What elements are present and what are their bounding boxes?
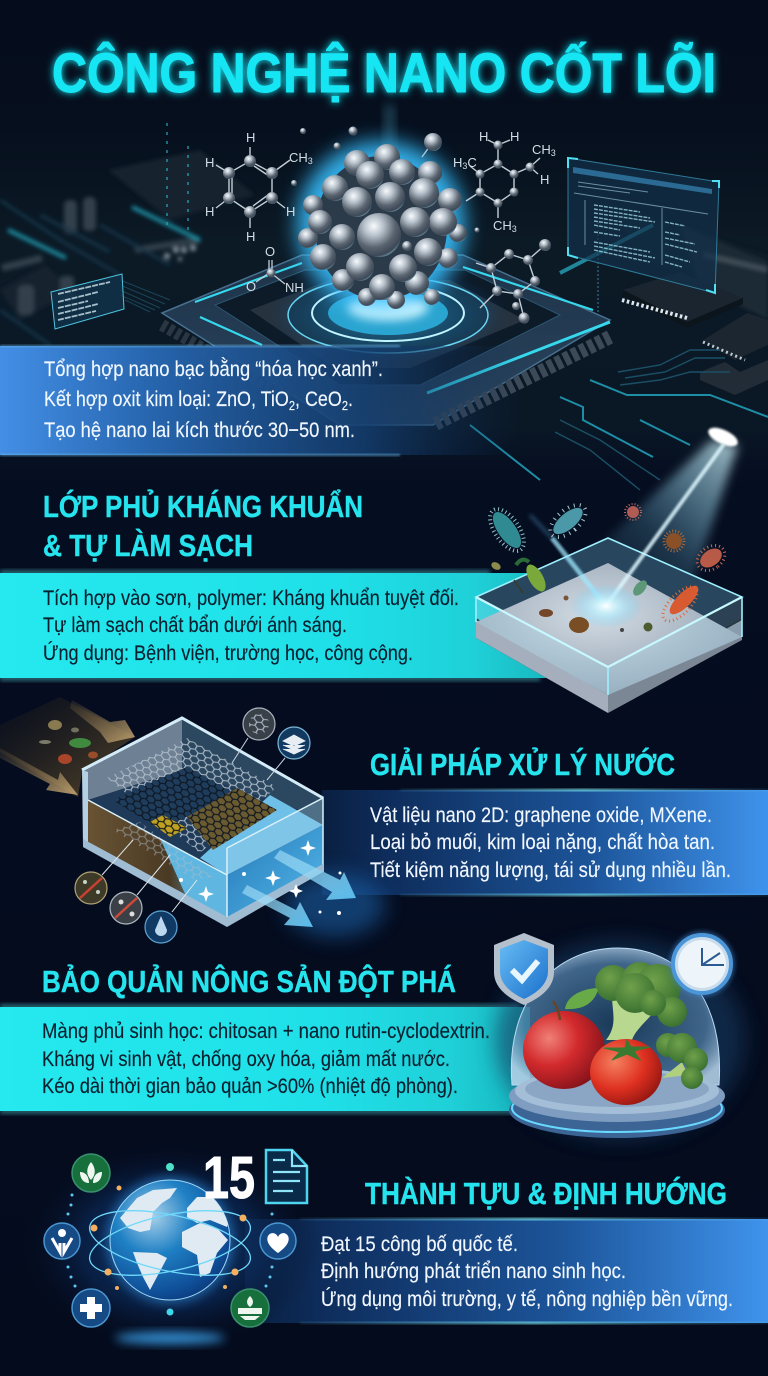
holographic data panel right xyxy=(568,158,719,293)
panel: preservation band xyxy=(0,1004,530,1114)
satellite atoms xyxy=(291,126,480,232)
heading: water treatment: GIẢI PHÁP XỬ LÝ NƯỚC xyxy=(370,746,675,782)
text block: synthesis: Tạo hệ nano lai kích thước 30−50 nm. xyxy=(44,419,355,442)
orbit dots xyxy=(66,1194,274,1288)
light beam xyxy=(590,440,738,590)
icon: hexagon lattice callout xyxy=(232,708,275,763)
molecule: trimethylbenzene xyxy=(453,129,556,234)
molecule: trimethylbenzene: 3 xyxy=(551,148,556,158)
backdrop glow xyxy=(495,940,745,1140)
icon: caring hands xyxy=(44,1223,80,1259)
icon: clean water callout xyxy=(145,880,197,943)
text block: preservation xyxy=(42,1020,490,1098)
lamp xyxy=(706,424,740,450)
icon: no metals callout xyxy=(110,855,170,924)
molecule: carbamate: O xyxy=(265,244,275,259)
central processor chip xyxy=(162,255,610,425)
heading: agricultural preservation: BẢO QUẢN NÔNG SẢN ĐỘT PHÁ xyxy=(42,963,456,999)
molecule: toluene: H xyxy=(286,204,295,219)
molecule: trimethylbenzene: H xyxy=(540,172,549,187)
molecule: trimethylbenzene: C xyxy=(467,155,477,170)
molecule: carbamate: NH xyxy=(285,280,304,295)
heading: antibacterial coating: & TỰ LÀM SẠCH xyxy=(43,528,253,563)
molecule: toluene: 3 xyxy=(308,156,313,166)
molecule: carbamate: O xyxy=(246,279,256,294)
icon: layered sheets callout xyxy=(267,727,310,780)
molecule: trimethylbenzene: H xyxy=(510,129,519,144)
text block: water: Vật liệu nano 2D: graphene oxide, MXene. xyxy=(370,804,712,827)
outflow glow xyxy=(285,873,385,937)
icon: heart with pulse xyxy=(260,1223,296,1259)
glass dome xyxy=(511,948,720,1085)
text block: synthesis: Tổng hợp nano bạc bằng “hóa học xanh”. xyxy=(44,358,383,381)
heading: antibacterial coating: LỚP PHỦ KHÁNG KHUẨN xyxy=(43,488,363,524)
text block: achievements: Định hướng phát triển nano sinh học. xyxy=(321,1260,626,1283)
heading: antibacterial coating xyxy=(43,488,363,563)
orbit rings xyxy=(84,1199,256,1287)
hero illustration: nano silver particle on circuit chip xyxy=(0,105,768,500)
icon: shield with check xyxy=(494,933,554,1005)
broccoli small xyxy=(656,1033,708,1089)
text block: coating: Tích hợp vào sơn, polymer: Kháng khuẩn tuyệt đối. xyxy=(43,587,459,610)
icon: no contaminants callout xyxy=(75,840,133,904)
text block: water: Loại bỏ muối, kim loại nặng, chất hòa tan. xyxy=(370,831,715,854)
icon: leaf xyxy=(72,1154,110,1192)
text block: preservation: Màng phủ sinh học: chitosan + nano rutin-cyclodextrin. xyxy=(42,1020,490,1043)
icon: document xyxy=(266,1150,307,1203)
text block: synthesis: 2 xyxy=(342,398,348,413)
molecule: toluene: H xyxy=(205,204,214,219)
glass slab xyxy=(476,538,742,713)
text block: preservation: Kéo dài thời gian bảo quản >60% (nhiệt độ phòng). xyxy=(42,1075,458,1098)
text block: achievements: Đạt 15 công bố quốc tế. xyxy=(321,1233,518,1256)
molecule: lower right ring xyxy=(476,239,551,324)
dirty inflow stream and arrows xyxy=(0,697,135,797)
tomato xyxy=(590,1039,662,1105)
icon: clock xyxy=(669,931,735,997)
ground glow xyxy=(115,1332,225,1344)
publication count: 15 xyxy=(203,1145,255,1211)
text block: synthesis xyxy=(44,358,383,442)
nanoparticle cluster xyxy=(291,126,480,309)
light rays xyxy=(530,444,724,628)
holographic data panel left xyxy=(51,274,124,329)
clean outflow arrows and sparkles xyxy=(179,840,356,927)
orbit nodes xyxy=(90,1163,246,1316)
panel: antibacterial band xyxy=(0,570,560,681)
panel: green synthesis band xyxy=(0,345,520,456)
molecule: trimethylbenzene: H xyxy=(453,155,462,170)
molecule: toluene: CH xyxy=(289,150,308,165)
text block: preservation: Kháng vi sinh vật, chống oxy hóa, giảm mất nước. xyxy=(42,1048,450,1071)
text block: coating: Tự làm sạch chất bẩn dưới ánh sáng. xyxy=(43,614,347,637)
text block: synthesis: 2 xyxy=(289,398,295,413)
illustration: globe with sustainability icons xyxy=(43,1148,308,1350)
text block: coating xyxy=(43,587,459,665)
globe xyxy=(106,1176,234,1304)
board chip right xyxy=(622,272,768,395)
dome base xyxy=(509,1068,725,1138)
circuit board backdrop xyxy=(0,120,768,500)
illustration: water filter box xyxy=(0,697,385,943)
bacteria xyxy=(483,499,730,633)
molecule: trimethylbenzene: CH xyxy=(493,218,512,233)
text block: achievements xyxy=(321,1233,733,1311)
broccoli large xyxy=(565,962,687,1040)
text block: synthesis: Kết hợp oxit kim loại: ZnO, TiO xyxy=(44,388,331,411)
text block: water xyxy=(370,804,731,882)
board traces xyxy=(555,350,730,490)
illustration: self-cleaning glass slab xyxy=(476,424,742,713)
background halo xyxy=(20,1140,320,1350)
molecule: toluene xyxy=(205,130,313,244)
text block: synthesis: . xyxy=(348,388,353,411)
illustration: produce under glass dome xyxy=(494,931,745,1140)
molecule: trimethylbenzene: H xyxy=(479,129,488,144)
text block: synthesis: , CeO xyxy=(295,388,342,411)
icon: agriculture xyxy=(231,1289,269,1327)
molecule: toluene: H xyxy=(246,229,255,244)
text block: coating: Ứng dụng: Bệnh viện, trường học, công cộng. xyxy=(43,642,413,665)
graphene layers xyxy=(107,738,277,880)
molecule: trimethylbenzene: CH xyxy=(532,142,551,157)
molecule: trimethylbenzene: 3 xyxy=(462,161,467,171)
panel: water treatment band xyxy=(322,789,768,896)
apple xyxy=(523,1001,605,1089)
vertical glow above particle xyxy=(385,105,394,165)
molecule: trimethylbenzene: 3 xyxy=(512,224,517,234)
molecule: toluene: H xyxy=(205,155,214,170)
icon: medical cross xyxy=(72,1289,110,1327)
tank body xyxy=(82,718,323,927)
molecule: toluene: H xyxy=(246,130,255,145)
molecule: carbamate xyxy=(246,244,304,295)
panel: achievements band xyxy=(245,1218,768,1324)
